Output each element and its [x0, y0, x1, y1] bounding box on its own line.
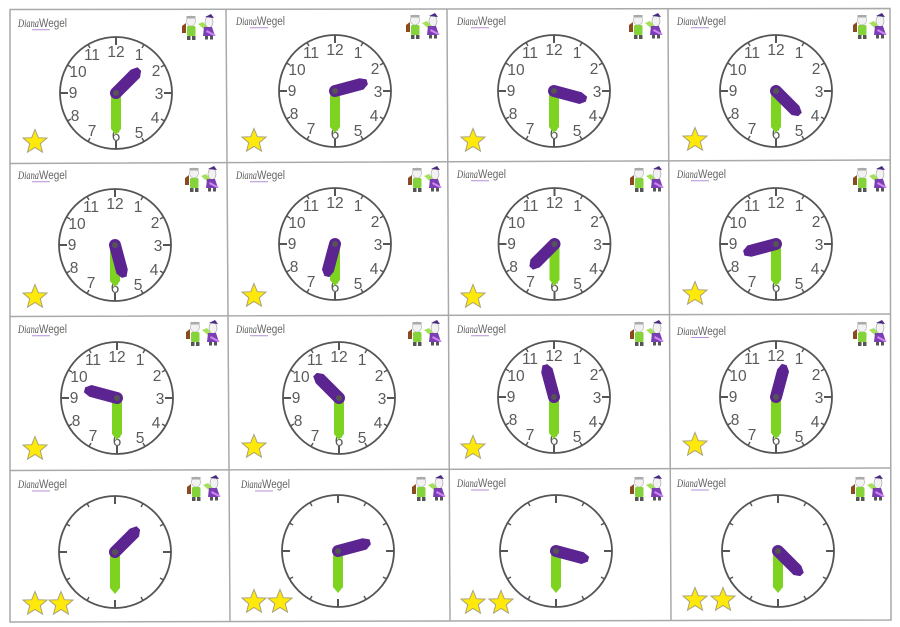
logo: Diana — [456, 14, 478, 28]
card 2: half past two — [235, 13, 440, 151]
icon: characters — [408, 166, 442, 192]
clock — [61, 342, 173, 454]
logo — [456, 14, 506, 28]
clock: 8 — [294, 413, 302, 430]
clock: 9 — [292, 390, 300, 407]
clock: 6 — [335, 433, 343, 450]
logo: Diana — [676, 167, 698, 181]
logo: Wegel — [698, 326, 726, 338]
clock: 5 — [795, 123, 803, 140]
clock: 5 — [358, 430, 366, 447]
clock: 8 — [509, 412, 517, 429]
icon: characters — [186, 320, 220, 346]
card 4: half past four — [676, 13, 887, 150]
clock: 3 — [593, 237, 602, 254]
logo: Wegel — [39, 479, 67, 491]
clock — [720, 188, 832, 300]
clock: 8 — [509, 106, 517, 123]
clock: 7 — [87, 275, 95, 292]
clock: 9 — [288, 83, 296, 100]
clock: 5 — [354, 123, 362, 140]
clock: 7 — [307, 274, 315, 291]
icon: characters — [412, 475, 446, 501]
clock: 10 — [507, 368, 525, 385]
clock: 9 — [507, 236, 516, 253]
clock: 7 — [88, 123, 96, 140]
clock: 4 — [370, 108, 379, 125]
clock: 2 — [812, 61, 820, 78]
clock: 12 — [106, 196, 124, 213]
clock: 8 — [509, 259, 518, 276]
clock: 6 — [331, 126, 339, 143]
clock — [279, 188, 391, 300]
clock: 1 — [795, 198, 803, 215]
clock — [498, 188, 610, 300]
clock: 3 — [815, 390, 823, 407]
clock: 5 — [573, 429, 581, 446]
clock: 6 — [550, 279, 559, 296]
clock — [282, 495, 394, 607]
clock: 2 — [371, 61, 379, 78]
clock: 8 — [290, 259, 298, 276]
clock: 12 — [108, 349, 126, 366]
logo — [676, 14, 726, 28]
logo: Diana — [676, 476, 698, 490]
clock: 1 — [354, 45, 362, 62]
logo: Wegel — [478, 478, 506, 490]
clock: 11 — [303, 198, 319, 215]
clock: 11 — [522, 198, 539, 215]
logo: Wegel — [698, 169, 726, 181]
clock: 2 — [375, 368, 383, 385]
clock: 4 — [811, 108, 820, 125]
card 1: half past one — [17, 14, 216, 152]
clock: 1 — [573, 351, 581, 368]
clock: 4 — [374, 415, 383, 432]
card 5: half past five — [17, 166, 219, 307]
clock: 2 — [153, 368, 161, 385]
clock: 3 — [374, 237, 382, 254]
icon: characters — [853, 166, 887, 192]
star — [23, 130, 47, 152]
card 6: half past six — [235, 166, 442, 306]
icon: characters — [853, 13, 887, 39]
clock: 9 — [288, 236, 296, 253]
stars — [242, 590, 292, 612]
clock: 1 — [136, 352, 144, 369]
icon: characters — [851, 475, 885, 501]
clock: 9 — [69, 85, 77, 102]
clock: 10 — [729, 368, 747, 385]
clock: 1 — [795, 45, 803, 62]
logo: Diana — [17, 168, 39, 182]
clock: 7 — [89, 428, 97, 445]
clock: 2 — [812, 367, 820, 384]
stars — [461, 590, 513, 613]
clock: 11 — [744, 351, 760, 368]
clock: 8 — [731, 259, 739, 276]
logo: Wegel — [257, 16, 285, 28]
clock — [498, 35, 610, 147]
clock — [60, 37, 172, 149]
card 13: blank clock half past one — [17, 475, 221, 614]
clock: 10 — [69, 64, 87, 81]
card 7: half past seven — [456, 166, 664, 307]
clock: 7 — [748, 427, 756, 444]
clock: 3 — [815, 237, 823, 254]
star — [683, 432, 707, 455]
icon: characters — [408, 320, 442, 346]
logo — [456, 322, 506, 336]
clock: 5 — [573, 276, 582, 293]
stars — [683, 588, 735, 610]
clock: 6 — [112, 128, 120, 145]
logo — [235, 322, 285, 336]
logo: Wegel — [478, 16, 506, 28]
clock: 12 — [546, 195, 563, 212]
clock: 2 — [152, 63, 160, 80]
clock: 6 — [550, 126, 558, 143]
clock: 6 — [113, 433, 121, 450]
clock: 4 — [151, 110, 160, 127]
logo: Diana — [17, 477, 39, 491]
icon: characters — [630, 475, 664, 501]
clock: 11 — [85, 352, 101, 369]
icon: characters — [406, 13, 440, 39]
clock — [279, 35, 391, 147]
clock: 8 — [70, 260, 78, 277]
clock: 8 — [290, 106, 298, 123]
logo: Diana — [235, 322, 257, 336]
clock: 2 — [151, 215, 159, 232]
card 8: half past eight — [676, 166, 887, 304]
clock: 12 — [330, 349, 348, 366]
clock: 3 — [593, 390, 601, 407]
clock: 7 — [526, 427, 534, 444]
clock: 2 — [590, 367, 598, 384]
clock: 12 — [326, 42, 344, 59]
clock: 9 — [729, 83, 737, 100]
clock: 12 — [767, 42, 785, 59]
star — [461, 128, 485, 151]
clock: 3 — [593, 84, 601, 101]
clock: 5 — [795, 429, 803, 446]
clock: 7 — [526, 274, 535, 291]
clock: 11 — [522, 351, 538, 368]
clock: 8 — [72, 413, 80, 430]
clock: 11 — [84, 47, 100, 64]
clock: 8 — [71, 108, 79, 125]
logo — [456, 476, 506, 490]
clock — [498, 341, 610, 453]
clock: 3 — [374, 84, 382, 101]
clock: 3 — [154, 238, 162, 255]
logo: Wegel — [39, 324, 67, 336]
icon: characters — [630, 166, 664, 192]
clock: 10 — [68, 216, 86, 233]
clock: 1 — [354, 198, 362, 215]
star — [23, 284, 47, 307]
clock: 12 — [767, 195, 785, 212]
clock: 4 — [150, 262, 159, 279]
clock: 3 — [815, 84, 823, 101]
clock — [720, 341, 832, 453]
clock: 10 — [70, 369, 88, 386]
clock: 7 — [748, 274, 756, 291]
stars — [23, 592, 73, 614]
clock: 4 — [589, 414, 598, 431]
clock: 11 — [83, 199, 99, 216]
logo — [17, 322, 67, 336]
clock: 5 — [136, 430, 144, 447]
logo — [676, 167, 726, 181]
clock: 9 — [507, 83, 515, 100]
logo: Wegel — [257, 170, 285, 182]
clock: 5 — [135, 125, 143, 142]
logo — [17, 168, 67, 182]
logo: Wegel — [478, 169, 506, 181]
logo — [235, 168, 285, 182]
card 15: blank clock half past three — [456, 475, 664, 613]
clock — [59, 189, 171, 301]
star — [242, 284, 266, 306]
clock — [720, 35, 832, 147]
clock — [722, 495, 834, 607]
icon: characters — [182, 14, 216, 40]
logo — [456, 167, 506, 181]
star — [242, 128, 266, 151]
logo: Wegel — [698, 16, 726, 28]
clock: 12 — [545, 348, 563, 365]
clock: 9 — [70, 390, 78, 407]
clock: 11 — [744, 45, 760, 62]
star — [242, 434, 266, 457]
clock: 1 — [573, 198, 582, 215]
logo: Diana — [676, 324, 698, 338]
clock: 10 — [508, 215, 525, 232]
clock: 6 — [772, 432, 780, 449]
logo: Diana — [235, 14, 257, 28]
card 16: blank clock half past four — [676, 475, 885, 610]
clock: 11 — [303, 45, 319, 62]
clock: 6 — [331, 279, 339, 296]
clock: 4 — [152, 415, 161, 432]
icon: characters — [185, 166, 219, 192]
clock: 7 — [748, 121, 756, 138]
logo — [676, 324, 726, 338]
logo — [676, 476, 726, 490]
clock: 6 — [772, 126, 780, 143]
clock — [500, 495, 612, 607]
clock: 11 — [522, 45, 538, 62]
card 3: half past three — [456, 13, 663, 151]
logo — [235, 14, 285, 28]
clock: 12 — [767, 348, 785, 365]
logo: Wegel — [478, 324, 506, 336]
clock: 12 — [545, 42, 563, 59]
logo: Wegel — [39, 170, 67, 182]
clock: 2 — [371, 214, 379, 231]
clock: 5 — [795, 276, 803, 293]
clock: 4 — [811, 261, 820, 278]
clock: 4 — [811, 414, 820, 431]
clock: 9 — [729, 389, 737, 406]
clock: 10 — [288, 215, 306, 232]
clock: 1 — [795, 351, 803, 368]
clock: 4 — [589, 261, 598, 278]
logo: Diana — [17, 16, 39, 30]
clock: 1 — [358, 352, 366, 369]
star — [683, 128, 707, 150]
clock: 10 — [729, 62, 747, 79]
clock — [59, 496, 171, 608]
clock: 9 — [68, 237, 76, 254]
clock: 10 — [507, 62, 525, 79]
star — [461, 284, 485, 307]
clock: 6 — [111, 280, 119, 297]
logo — [240, 477, 290, 491]
logo: Diana — [456, 167, 478, 181]
logo: Diana — [456, 322, 478, 336]
logo: Wegel — [262, 479, 290, 491]
clock: 7 — [526, 121, 534, 138]
logo — [17, 16, 67, 30]
clock: 10 — [292, 369, 310, 386]
clock: 5 — [573, 123, 581, 140]
clock: 1 — [134, 199, 142, 216]
clock: 4 — [589, 108, 598, 125]
clock: 10 — [729, 215, 747, 232]
icon: characters — [629, 13, 663, 39]
clock: 8 — [731, 412, 739, 429]
star — [683, 282, 707, 304]
clock: 3 — [378, 391, 386, 408]
card 12: half past twelve — [676, 320, 887, 455]
clock: 11 — [744, 198, 760, 215]
clock: 1 — [135, 47, 143, 64]
logo: Diana — [17, 322, 39, 336]
clock: 11 — [307, 352, 323, 369]
clock: 7 — [307, 121, 315, 138]
logo: Diana — [240, 477, 262, 491]
clock: 1 — [573, 45, 581, 62]
logo: Wegel — [257, 324, 285, 336]
clock: 6 — [772, 279, 780, 296]
clock: 2 — [590, 214, 599, 231]
logo: Diana — [456, 476, 478, 490]
logo: Wegel — [39, 18, 67, 30]
clock: 6 — [550, 432, 558, 449]
card 14: blank clock half past two — [240, 475, 446, 612]
clock: 9 — [507, 389, 515, 406]
clock: 8 — [731, 106, 739, 123]
clock: 3 — [156, 391, 164, 408]
clock — [283, 342, 395, 454]
icon: characters — [630, 320, 664, 346]
icon: characters — [187, 475, 221, 501]
clock: 2 — [590, 61, 598, 78]
clock: 12 — [107, 44, 125, 61]
clock: 12 — [326, 195, 344, 212]
star — [23, 436, 47, 459]
card 11: half past eleven — [456, 320, 664, 458]
clock: 3 — [155, 86, 163, 103]
clock: 10 — [288, 62, 306, 79]
logo — [17, 477, 67, 491]
logo: Diana — [235, 168, 257, 182]
star — [461, 436, 485, 458]
card 10: half past ten — [235, 320, 442, 457]
clock: 4 — [370, 261, 379, 278]
icon: characters — [853, 320, 887, 346]
clock: 2 — [812, 214, 820, 231]
clock: 9 — [729, 236, 737, 253]
card 9: half past nine — [17, 320, 220, 459]
clock: 7 — [311, 428, 319, 445]
logo: Diana — [676, 14, 698, 28]
clock: 5 — [134, 277, 142, 294]
logo: Wegel — [698, 478, 726, 490]
clock: 5 — [354, 276, 362, 293]
